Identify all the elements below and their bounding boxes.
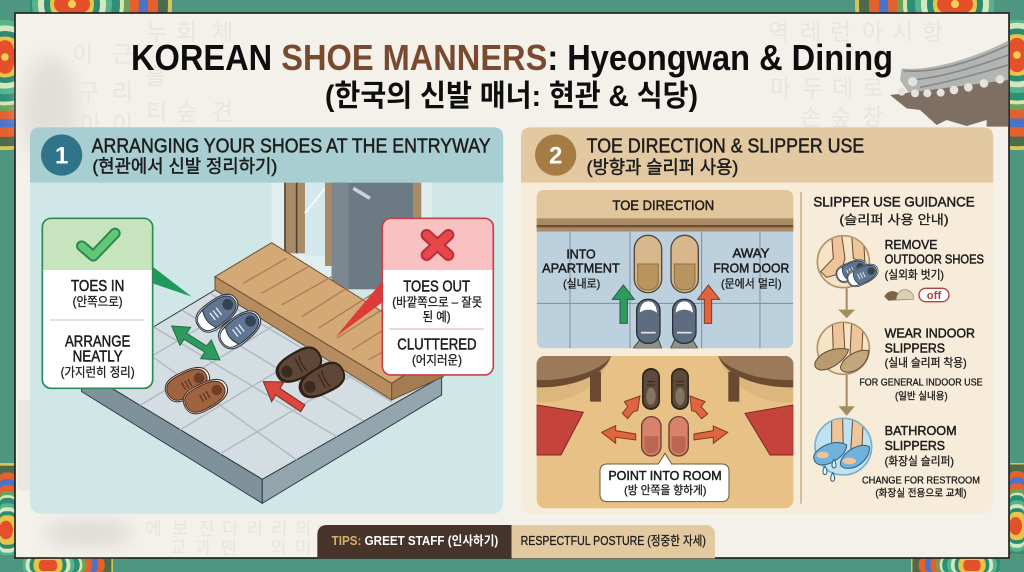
step 1 text: OUTDOOR SHOES — [885, 251, 984, 266]
panel 2 header: TOE DIRECTION & SLIPPER USE — [587, 134, 864, 157]
card: toes in: NEATLY — [73, 349, 123, 366]
tiled floor — [82, 290, 442, 503]
label: into apartment: APARTMENT — [542, 261, 620, 276]
dining room card — [537, 356, 793, 508]
faint hangul background: 항 — [922, 19, 943, 45]
faint hangul background: 티 — [146, 99, 167, 125]
illustration: entryway scene — [42, 183, 493, 503]
pointer: red — [336, 280, 383, 337]
step 3 text — [862, 423, 980, 500]
step 3 text: (화장실 슬리퍼) — [885, 455, 954, 468]
icon: removing shoes — [817, 235, 881, 290]
wooden step — [215, 243, 443, 400]
title: KOREAN SHOE MANNERS: Hyeongwan & Dining — [131, 37, 893, 78]
icon: slippers off: off — [927, 290, 941, 302]
pink slippers — [642, 417, 688, 456]
callout: point into room: (방 안쪽을 향하게) — [624, 483, 707, 497]
label: into apartment — [542, 246, 620, 290]
faint hangul background: 보 — [172, 519, 189, 539]
card: toes out — [382, 218, 493, 375]
step 3 text: CHANGE FOR RESTROOM — [862, 475, 980, 486]
card: toes out: (바깥쪽으로 – 잘못 — [392, 296, 482, 310]
step 2 text: FOR GENERAL INDOOR USE — [859, 378, 983, 389]
faint hangul background: 창 — [862, 104, 883, 130]
panel 2 header: 2 — [549, 142, 562, 169]
arrow: toes out — [263, 382, 305, 412]
card: toes out: CLUTTERED — [397, 336, 477, 353]
icon: bathroom slippers — [814, 418, 872, 481]
step 2 text: SLIPPERS — [885, 341, 945, 356]
label: away from door: FROM DOOR — [713, 261, 789, 276]
pointer: green — [153, 267, 192, 297]
faint hangul background: 아 — [862, 19, 883, 45]
step 2 text — [859, 326, 983, 402]
brown shoes — [161, 361, 232, 419]
faint hangul background: 다 — [222, 519, 239, 539]
panel 1 header: (현관에서 신발 정리하기) — [92, 157, 277, 177]
title — [131, 37, 893, 113]
step 1 text — [885, 237, 984, 281]
guidance heading: (슬리퍼 사용 안내) — [839, 213, 949, 227]
cluttered loafers — [270, 341, 350, 405]
panel 2 header — [521, 127, 993, 183]
arrow: away from door — [698, 285, 720, 323]
faint hangul background: 구 — [78, 79, 99, 105]
label: into apartment: INTO — [566, 246, 596, 261]
faint hangul background: 의 — [295, 519, 312, 539]
step 1 text: REMOVE — [885, 237, 937, 252]
panel 1 header — [30, 127, 503, 183]
tip: greet staff: TIPS: GREET STAFF (인사하기) — [332, 533, 498, 548]
panel 1: arranging shoes — [30, 127, 503, 514]
faint hangul background: 록 — [45, 119, 66, 145]
label: away from door: AWAY — [732, 246, 770, 261]
slipper use guidance — [800, 192, 984, 504]
toe direction card: TOE DIRECTION — [612, 197, 714, 213]
panel 2 header: (방향과 슬리퍼 사용) — [587, 157, 738, 177]
step 3 text: SLIPPERS — [885, 438, 945, 453]
faint hangul background: 시 — [892, 19, 913, 45]
faint hangul background: 리 — [112, 79, 133, 105]
faint hangul background: 라 — [247, 519, 264, 539]
faint hangul background: 미 — [295, 538, 312, 558]
faint hangul background: 에 — [145, 519, 162, 539]
card: toes out: TOES OUT — [403, 279, 470, 296]
faint hangul background: 누 — [146, 19, 167, 45]
card: toes in — [42, 218, 153, 388]
faint hangul background: 견 — [212, 99, 233, 125]
faint hangul background: 마 — [770, 75, 791, 101]
faint hangul background: 전 — [198, 519, 215, 539]
faint hangul background: 회 — [176, 19, 197, 45]
faint hangul background: 과 — [195, 538, 212, 558]
label: into apartment: (실내로) — [563, 277, 601, 290]
footer tips bar — [317, 525, 715, 558]
faint hangul background: 체 — [212, 19, 233, 45]
tip: respectful posture — [512, 525, 715, 558]
faint hangul background: 교 — [170, 538, 187, 558]
step 2 text: (일반 실내용) — [895, 390, 948, 402]
faint hangul background: 역 — [768, 19, 789, 45]
card: toes in: (가지런히 정리) — [61, 366, 135, 380]
guidance heading — [813, 194, 975, 227]
card: toes in: TOES IN — [71, 278, 124, 295]
panel 2: toe direction and slipper use — [521, 127, 993, 514]
tile floor — [537, 232, 793, 348]
guidance heading: SLIPPER USE GUIDANCE — [813, 194, 975, 210]
step 2 text: (실내 슬리퍼 착용) — [885, 357, 967, 370]
card: toes out: (어지러운) — [412, 353, 462, 367]
icon: cross mark — [427, 235, 448, 255]
faint hangul background: 팬 — [220, 538, 237, 558]
label: away from door: (문에서 멀리) — [721, 276, 782, 290]
card: toes out: 된 예) — [423, 310, 451, 324]
neat sneakers — [191, 288, 266, 354]
faint hangul background: 근 — [112, 41, 133, 67]
direction arrows — [602, 396, 728, 443]
step arrows — [841, 288, 853, 414]
arrow: into apartment — [612, 285, 634, 323]
faint hangul background: 아 — [80, 111, 101, 137]
step 1 text: (실외화 벗기) — [885, 268, 944, 281]
door and frame — [272, 183, 432, 289]
tables and cushions — [537, 356, 793, 455]
faint hangul background: 이 — [72, 41, 93, 67]
panel 1 header: 1 — [55, 142, 68, 169]
icon: slippers off — [884, 288, 949, 302]
faint hangul background: 숲 — [176, 99, 197, 125]
faint hangul background: 두 — [802, 75, 823, 101]
faint hangul background: 숲 — [830, 104, 851, 130]
faint hangul background: 리 — [271, 519, 288, 539]
illustration: hanok roof — [890, 41, 1008, 127]
slippers top view — [634, 235, 698, 293]
panel 1 header: ARRANGING YOUR SHOES AT THE ENTRYWAY — [92, 134, 491, 157]
arrow: neat alignment — [172, 326, 220, 360]
faint hangul background: 흘 — [145, 63, 166, 89]
faint hangul background: 런 — [830, 19, 851, 45]
toe direction card — [537, 190, 793, 348]
step 3 text: (화장실 전용으로 교체) — [875, 488, 967, 500]
tip: greet staff — [317, 525, 512, 558]
step 2 text: WEAR INDOOR — [885, 326, 975, 341]
dress shoes — [642, 368, 689, 410]
subtitle: (한국의 신발 매너: 현관 & 식당) — [325, 80, 698, 113]
faint hangul background: 이 — [112, 111, 133, 137]
callout: point into room — [600, 453, 729, 502]
step 3 text: BATHROOM — [885, 423, 957, 438]
faint hangul background: 데 — [832, 75, 853, 101]
label: away from door — [713, 246, 789, 290]
faint hangul background: 손 — [800, 104, 821, 130]
tip: respectful posture: RESPECTFUL POSTURE (정중한 자세) — [521, 534, 706, 548]
icon: check mark — [82, 233, 115, 256]
card: toes in: (안쪽으로) — [73, 295, 123, 309]
icon: indoor slippers — [815, 322, 869, 374]
card: toes in: ARRANGE — [65, 334, 130, 351]
faint hangul background: 로 — [862, 75, 883, 101]
shoes top view — [637, 299, 696, 343]
faint hangul background: 레 — [800, 19, 821, 45]
faint hangul background: 의 — [270, 538, 287, 558]
callout: point into room: POINT INTO ROOM — [608, 468, 722, 483]
